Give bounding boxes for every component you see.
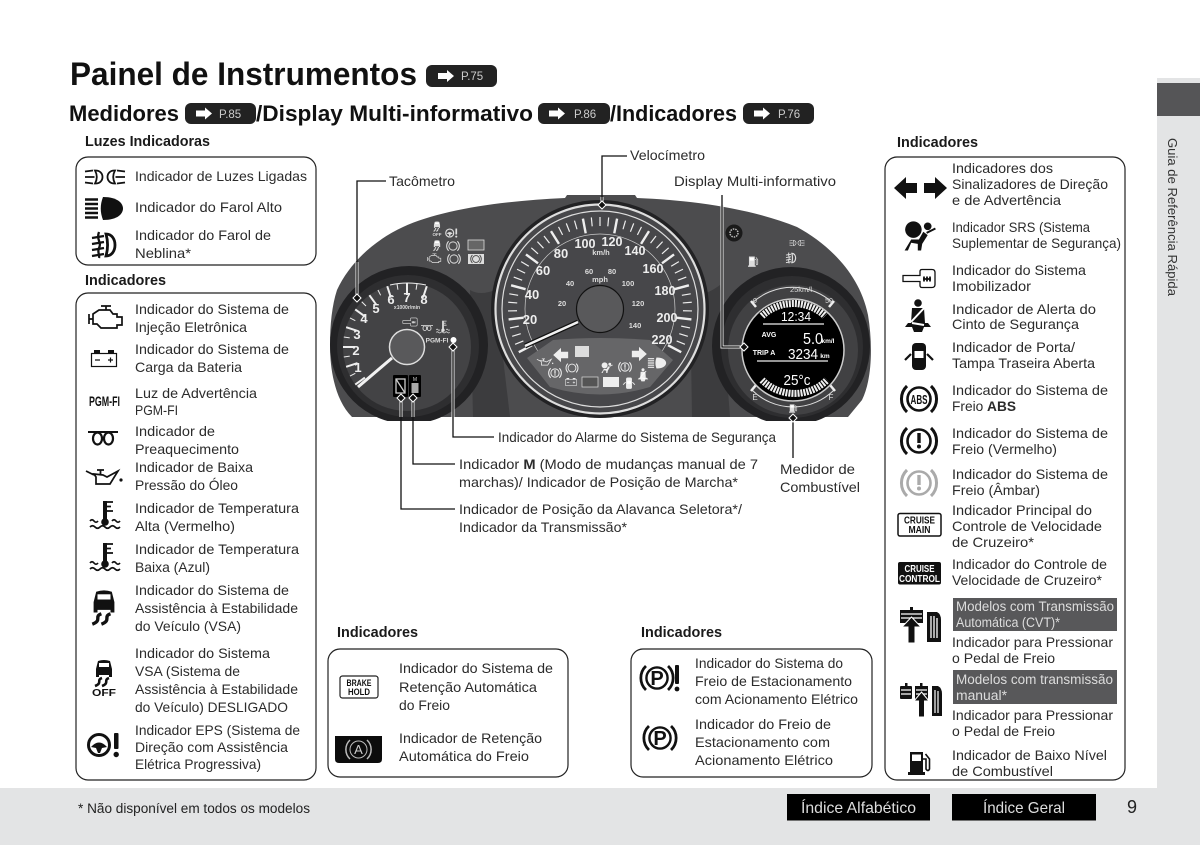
text: estacionamento: Indicador do Sistema do [695,655,843,671]
mph numbers: 140 [629,321,641,330]
speedometer: km/h [592,248,610,257]
text: indicadores left: Indicador de Temperatura [135,541,299,557]
pointer: Alarme [449,343,776,445]
icon: luzes ligadas [85,170,125,184]
text: retenção: Indicador de Retenção [399,730,542,746]
text: indicadores right: de Cruzeiro* [952,534,1035,550]
icon: brake hold [340,676,378,698]
km/h numbers [523,234,678,347]
gauge scale labels: E [752,393,758,402]
icon: cruise control [898,562,941,585]
panel: luzes indicadoras [76,157,316,265]
icon: cinto de segurança [905,299,931,332]
mph numbers: 60 [585,267,593,276]
mph numbers: 20 [558,299,566,308]
multi-information display gauge [712,267,870,425]
text: indicadores right [952,160,1121,779]
text: indicadores right: Freio (Vermelho) [952,441,1057,457]
heading: Indicadores middle right: Indicadores [641,625,722,641]
black display [742,299,844,401]
icon: P: P [653,728,667,750]
text: indicadores right: Freio (Âmbar) [952,482,1040,498]
display readouts: TRIP A [753,350,775,357]
text: luzes: Neblina* [135,245,192,261]
icon: temperatura baixa [90,543,120,570]
footer band: * Não disponível em todos os modelos [78,801,310,816]
footer band: Índice Alfabético [801,798,916,817]
text: estacionamento: Estacionamento com [695,734,830,750]
mph numbers [558,267,644,330]
mph numbers: 40 [566,279,574,288]
icon: imobilizador [903,270,935,288]
mph numbers: 100 [622,279,634,288]
text: indicadores left: Indicador de Temperatura [135,500,299,516]
tachometer numbers: 4 [360,311,368,326]
pointer: Velocímetro: Velocímetro [630,147,705,163]
icon: cruise main: MAIN [908,525,930,536]
text: estacionamento: com Acionamento Elétrico [695,691,858,707]
heading: Indicadores left: Indicadores [85,273,166,289]
display readouts: km [820,353,830,360]
km/h numbers: 140 [624,243,646,258]
speedometer major ticks [509,219,691,352]
upper left small indicators: OFF [432,232,442,237]
km/h numbers: 60 [536,263,550,278]
gear display [393,375,421,397]
tachometer ticks [343,283,427,385]
text: retenção: Indicador do Sistema de [399,660,553,676]
upper right small indicators [726,224,805,267]
text: luzes: Indicador do Farol de [135,227,271,243]
text: indicadores right: Suplementar de Segurança) [952,235,1121,251]
icon: ABS [901,386,937,412]
icon: PGM-FI: PGM-FI [89,393,120,409]
icon: A hold [335,736,382,763]
title: P.75 [461,71,483,83]
footer band: Índice Geral [983,798,1065,817]
pointer: Medidor de Combustível: Medidor de [780,461,855,477]
pointer: Tacômetro: Tacômetro [389,173,455,189]
icon: ABS: ABS [910,392,928,407]
text: indicadores left: Alta (Vermelho) [135,518,235,534]
text: indicadores right: Indicador para Pressionar [952,707,1113,723]
icon: VSA [92,590,114,624]
text: indicadores left: Indicador EPS (Sistema de [135,722,300,738]
icon: cruise control: CRUISE [904,564,935,575]
text: indicadores left: VSA (Sistema de [135,663,240,679]
text: indicadores right: Sinalizadores de Direção [952,176,1108,192]
text: indicadores left: Indicador do Sistema [135,645,270,661]
text: indicadores right: Indicador para Pressionar [952,634,1113,650]
text: indicadores right: de Combustível [952,763,1053,779]
text: indicadores left: do Veículo) DESLIGADO [135,699,288,715]
mph numbers: mph [592,275,608,284]
icon: brake hold: BRAKE [346,678,372,689]
text: indicadores right: Indicador do Sistema [952,262,1086,278]
km/h numbers: 20 [523,312,537,327]
icon: freio vermelho [901,428,937,454]
cluster body [330,195,871,417]
text: indicadores right: Indicador SRS (Sistema [952,219,1090,235]
text: indicadores left: Luz de Advertência [135,385,257,401]
icon: cruise control: CONTROL [899,574,940,585]
text: indicadores right: Freio ABS [952,398,1016,414]
km/h numbers: 180 [654,283,676,298]
text: estacionamento: Indicador do Freio de [695,716,831,732]
text: indicadores right: Tampa Traseira Aberta [952,355,1095,371]
gauge scale labels [752,285,834,402]
icon: VSA OFF: OFF [92,687,117,699]
tachometer: x1000r/min [394,305,420,311]
text: indicadores left: Baixa (Azul) [135,559,210,575]
panel: retenção automática [328,649,568,777]
display bar arcs [762,304,825,316]
pointer: Indicador M [409,394,758,490]
km/h numbers: 80 [554,246,568,261]
speed warning panel [527,338,673,394]
icon: freio âmbar [901,470,937,496]
icon: cruise main [898,514,941,536]
speedometer warning icons [537,346,666,389]
footer band: 9 [1127,797,1137,817]
icon: A hold: A [354,742,363,757]
title: Painel de Instrumentos [70,56,417,92]
text: indicadores left: do Veículo (VSA) [135,618,241,634]
pointer: Display Multi-informativo: Display Multi-informativo [674,173,836,189]
tachometer small indicators: PGM-FI [426,338,449,344]
display readouts: 5.0 [803,331,823,348]
text: retenção [399,660,553,764]
callout: modelos CVT: Automática (CVT)* [956,615,1061,630]
text: retenção: Automática do Freio [399,748,529,764]
icon: farol de neblina [92,232,115,258]
icon: farol alto [85,197,123,220]
text: indicadores left: Pressão do Óleo [135,477,238,493]
gauge outer arcs [752,287,834,407]
icon: preaquecimento [88,432,118,444]
heading: Luzes Indicadoras: Luzes Indicadoras [85,134,210,150]
upper left small indicators [428,221,484,264]
text: retenção: do Freio [399,697,450,713]
tachometer small indicators [403,318,456,344]
subtitle: P.76 [778,109,800,121]
pointer: Alarme: Indicador do Alarme do Sistema de Segurança [498,429,776,445]
text: indicadores left: Injeção Eletrônica [135,319,247,335]
text: estacionamento: Acionamento Elétrico [695,752,833,768]
text: luzes: Indicador do Farol Alto [135,199,282,215]
text: indicadores left: Indicador do Sistema de [135,582,289,598]
icon: P exclamação: P [650,668,664,690]
tachometer numbers: 3 [353,327,361,342]
icon: combustível [908,752,930,775]
km/h numbers: 120 [602,234,622,249]
km/h numbers: 100 [574,236,596,251]
tachometer numbers: 1 [354,360,362,375]
pointer: Alavanca Seletora: Indicador da Transmissão* [459,519,628,535]
panel: indicadores left [76,293,316,780]
km/h numbers: 40 [525,287,539,302]
text: indicadores left: Indicador de Baixa [135,459,253,475]
icon: EPS [88,733,119,757]
tachometer hub [390,330,424,364]
text: luzes [135,168,307,261]
pointer: Medidor de Combustível: Combustível [780,479,860,495]
tachometer needle [358,358,392,387]
tachometer [330,266,488,424]
text: indicadores right: o Pedal de Freio [952,650,1055,666]
instrument cluster [330,195,871,425]
icon: óleo [86,470,123,484]
gauge scale labels: 50 [825,298,833,305]
icon: sinalizadores de direção [894,177,947,199]
text: indicadores right: o Pedal de Freio [952,723,1055,739]
text: indicadores right: Indicador do Sistema de [952,466,1108,482]
icon: bateria [92,352,116,366]
tachometer numbers: 8 [420,292,428,307]
tachometer numbers: 7 [403,290,411,305]
tachometer numbers [352,290,428,375]
icon: brake hold: HOLD [348,687,370,698]
text: luzes: Indicador de Luzes Ligadas [135,168,307,184]
panel: indicadores right [885,157,1125,780]
text: indicadores right: Indicadores dos [952,160,1053,176]
text: indicadores left: Preaquecimento [135,441,239,457]
pointer: Indicador M: Indicador M (Modo de mudanças manual de 7 [459,456,758,472]
text: indicadores left: Direção com Assistência [135,739,288,755]
text: indicadores right: Imobilizador [952,278,1031,294]
tachometer numbers: 5 [372,301,380,316]
callout: modelos CVT [953,598,1117,631]
speedometer needle [525,322,578,346]
text: indicadores right: e de Advertência [952,192,1061,208]
side tab strip: Guia de Referência Rápida [1165,138,1180,297]
display readouts: 3234 [788,346,818,363]
text: indicadores left: Indicador do Sistema de [135,301,289,317]
display readouts: km/l [821,338,835,345]
text: indicadores left: Indicador de [135,423,215,439]
text: indicadores left [135,301,300,772]
text: indicadores right: Indicador do Sistema de [952,425,1108,441]
pointer: Alavanca Seletora [397,394,742,535]
icon: injeção eletrônica [89,306,122,328]
text: indicadores right: Cinto de Segurança [952,316,1079,332]
gear display: M [413,377,417,383]
icon: VSA OFF [92,660,117,699]
speedometer [491,200,709,418]
km/h numbers: 160 [642,261,664,276]
callout: modelos CVT: Modelos com Transmissão [956,599,1114,614]
icon: P [644,726,676,750]
side tab strip [1157,78,1200,788]
display readouts: 25°c [784,372,811,389]
icon: cruise main: CRUISE [904,516,935,526]
mph numbers: 80 [608,267,616,276]
icon: SRS [905,221,935,250]
speedometer minor ticks [508,217,692,344]
km/h numbers: 200 [656,310,678,325]
text: indicadores left: PGM-FI [135,402,178,418]
display readouts: 12:34 [781,309,811,324]
text: indicadores left: Carga da Bateria [135,359,242,375]
text: retenção: Retenção Automática [399,679,537,695]
text: indicadores left: Assistência à Estabilidade [135,600,298,616]
pointer: Tacômetro [353,173,455,302]
text: indicadores right: Indicador do Sistema de [952,382,1108,398]
speedometer hub [576,286,624,332]
tachometer numbers: 2 [352,343,360,358]
pointer: Display Multi-informativo [674,173,836,351]
mph numbers: 120 [632,299,644,308]
text: estacionamento: Freio de Estacionamento [695,673,852,689]
icon: porta aberta [905,343,933,370]
subtitle [69,101,814,126]
icon: pedal manual [900,683,942,717]
text: indicadores left: Indicador do Sistema de [135,341,289,357]
text: indicadores left: Elétrica Progressiva) [135,756,261,772]
icon: temperatura alta [90,501,120,528]
gauge scale labels: 25km/l [790,285,812,294]
text: estacionamento [695,655,858,768]
subtitle: P.86 [574,109,596,121]
callout: modelos manual: Modelos com transmissão [956,672,1113,687]
pointer: Indicador M: marchas)/ Indicador de Posição de Marcha* [459,474,739,490]
display readouts [753,309,835,389]
subtitle: Medidores [69,101,179,126]
icon: pedal CVT [900,607,941,643]
pointer: Medidor de Combustível [780,414,860,495]
panel: freio de estacionamento [631,649,872,777]
text: indicadores right: Indicador do Controle de [952,556,1107,572]
icon: P exclamação [641,665,679,691]
display readouts: AVG [762,332,777,339]
subtitle: P.85 [219,109,241,121]
text: indicadores right: Controle de Velocidade [952,518,1102,534]
tachometer numbers: 6 [387,292,395,307]
km/h numbers: 220 [652,332,672,347]
text: indicadores right: Indicador de Porta/ [952,339,1075,355]
footer band [0,788,1200,845]
text: indicadores right: Indicador Principal do [952,502,1092,518]
text: indicadores right: Indicador de Baixo Nível [952,747,1107,763]
text: indicadores right: Indicador de Alerta do [952,301,1096,317]
subtitle: /Indicadores [610,101,737,126]
callout: modelos manual [953,670,1117,704]
callout: modelos manual: manual* [956,688,1008,703]
gauge scale labels: 0 [753,298,757,305]
text: indicadores left: Assistência à Estabilidade [135,681,298,697]
gauge scale labels: F [829,393,834,402]
subtitle: /Display Multi-informativo [256,101,533,126]
text: indicadores right: Velocidade de Cruzeiro* [952,572,1103,588]
heading: Indicadores middle: Indicadores [337,625,418,641]
pointer: Velocímetro [598,147,705,209]
pointer: Alavanca Seletora: Indicador de Posição da Alavanca Seletora*/ [459,501,742,517]
heading: Indicadores right: Indicadores [897,135,978,151]
